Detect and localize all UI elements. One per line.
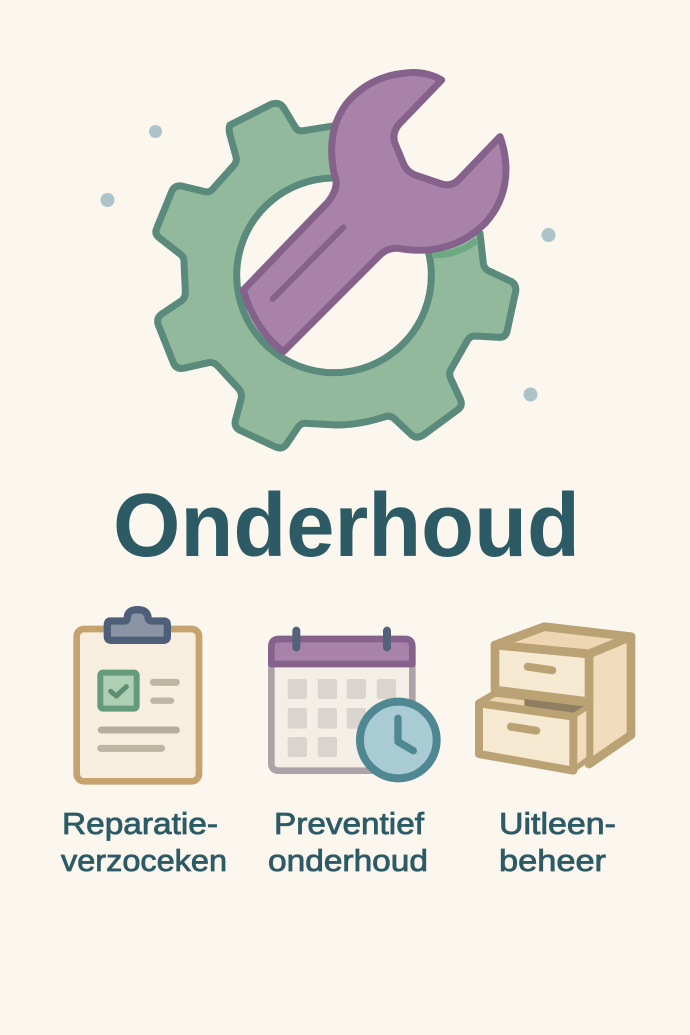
calendar rings xyxy=(296,631,387,647)
icon: filing drawers xyxy=(479,627,631,771)
label: Preventief onderhoud xyxy=(268,806,428,878)
open drawer interior xyxy=(479,693,589,716)
clipboard board xyxy=(77,629,199,781)
lower drawer handle xyxy=(511,727,536,731)
drawer inner side xyxy=(573,706,589,770)
title: Onderhoud xyxy=(113,476,580,576)
cabinet top xyxy=(495,627,631,654)
clipboard clip xyxy=(107,610,167,640)
label: Preventief onderhoud: Preventief xyxy=(274,806,424,841)
label: Reparatieverzoeken: verzoceken xyxy=(61,843,227,878)
wrench overlap highlight xyxy=(435,242,475,255)
lower drawer xyxy=(479,703,573,771)
label: Uitleenbeheer: Uitleen- xyxy=(499,806,616,841)
calendar header xyxy=(271,639,412,664)
check mark xyxy=(111,687,126,696)
text lines xyxy=(101,682,176,748)
clock xyxy=(360,702,437,778)
label: Preventief onderhoud: onderhoud xyxy=(268,843,428,878)
label: Reparatieverzoeken xyxy=(61,806,227,878)
wrench xyxy=(243,73,506,352)
cabinet side xyxy=(589,637,631,764)
calendar body xyxy=(271,663,412,771)
gear xyxy=(156,103,516,448)
drawer shadow xyxy=(524,699,586,714)
upper drawer xyxy=(495,645,589,702)
icon: clipboard xyxy=(77,610,199,781)
upper drawer handle xyxy=(528,667,552,670)
icon: gear and wrench xyxy=(156,73,516,448)
decorative dots xyxy=(100,125,556,402)
label: Uitleenbeheer: beheer xyxy=(499,843,606,878)
checkbox xyxy=(100,673,137,709)
calendar day cells xyxy=(288,679,396,757)
icon: calendar with clock xyxy=(271,631,437,778)
label: Uitleenbeheer xyxy=(499,806,616,878)
wrench groove xyxy=(273,227,343,299)
label: Reparatieverzoeken: Reparatie- xyxy=(62,806,218,841)
